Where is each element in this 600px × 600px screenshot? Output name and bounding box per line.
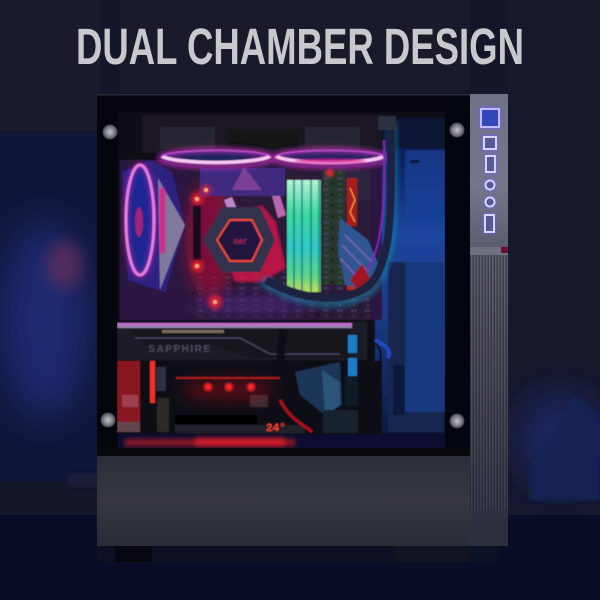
lower motherboard chamber bbox=[117, 361, 382, 434]
cpu air cooler with ring fan bbox=[122, 160, 185, 292]
side base bbox=[470, 519, 508, 546]
case interior bbox=[117, 112, 448, 448]
top fan tray bbox=[142, 115, 382, 153]
graphics card: SAPPHIRE bbox=[148, 344, 212, 355]
case glass frame bbox=[97, 94, 470, 456]
port light glow bbox=[481, 109, 499, 232]
red memory accents bbox=[347, 178, 357, 290]
red leds bbox=[191, 169, 334, 309]
red psu shroud glow bbox=[118, 434, 448, 448]
lower case shroud bbox=[97, 456, 470, 563]
usb and audio ports bbox=[484, 137, 496, 232]
case foot bbox=[470, 546, 500, 562]
digital temperature display: 24° bbox=[266, 423, 286, 435]
aio water block: aer bbox=[233, 236, 247, 246]
motherboard bbox=[120, 160, 382, 320]
blue gpu shroud and front cables bbox=[280, 330, 389, 433]
graphics card bbox=[117, 322, 367, 360]
blue cable chamber bbox=[375, 118, 445, 433]
braided radiator hoses bbox=[262, 116, 396, 303]
thumbscrews bbox=[100, 122, 464, 428]
black glass borders bbox=[97, 94, 470, 456]
top ring fans bbox=[160, 150, 386, 166]
front io panel bbox=[470, 94, 508, 247]
aio water block bbox=[203, 196, 286, 282]
ribbed front panel bbox=[470, 247, 508, 519]
atx cable bundle bbox=[338, 218, 380, 292]
rgb ram modules bbox=[287, 180, 321, 292]
pc case bbox=[97, 94, 508, 563]
power button bbox=[481, 109, 499, 127]
